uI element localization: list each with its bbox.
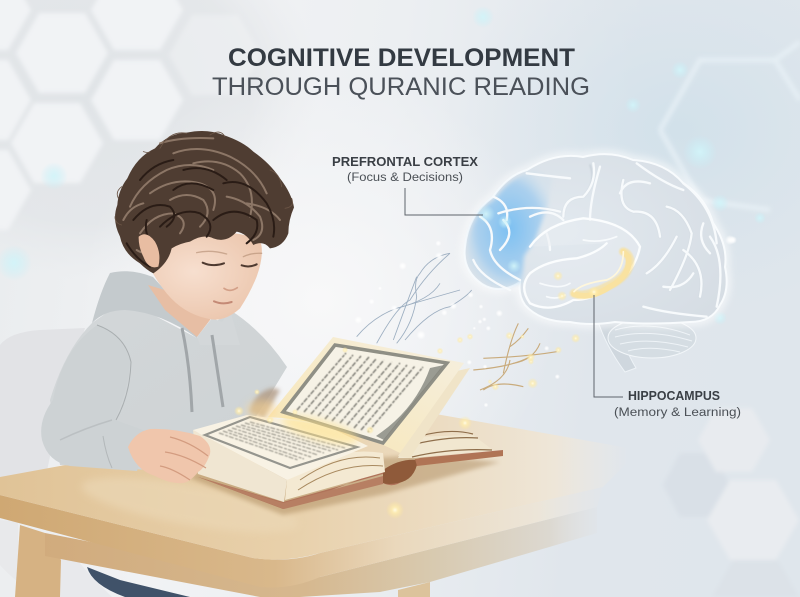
hoodie sleeve bbox=[41, 325, 148, 471]
book page block left bbox=[193, 430, 287, 502]
book lifted page behind bbox=[398, 368, 470, 458]
book lifted page bbox=[268, 337, 464, 453]
book page left text bbox=[219, 422, 345, 460]
gold sparkles bbox=[437, 332, 580, 391]
label: prefrontal cortex: PREFRONTAL CORTEX bbox=[332, 155, 479, 169]
chair bbox=[0, 328, 112, 597]
hippocampus glow bbox=[574, 252, 630, 296]
brain bbox=[465, 154, 727, 372]
eyes bbox=[197, 251, 262, 266]
neck bbox=[148, 285, 215, 337]
title: THROUGH QURANIC READING bbox=[212, 73, 590, 101]
label: hippocampus: HIPPOCAMPUS bbox=[628, 389, 720, 403]
book lifted page text bbox=[297, 353, 423, 432]
cerebellum bbox=[608, 318, 696, 358]
soft white area behind the boy bbox=[80, 70, 560, 530]
hood bbox=[92, 271, 197, 338]
frontal blue area bbox=[467, 170, 552, 288]
frontal glow spots bbox=[477, 205, 495, 223]
book shadow bbox=[190, 455, 500, 515]
boy bbox=[41, 131, 294, 471]
table leg right bbox=[398, 582, 430, 597]
title: COGNITIVE DEVELOPMENT bbox=[228, 44, 575, 72]
label: prefrontal cortex bbox=[332, 155, 479, 184]
hoodie body bbox=[50, 300, 287, 470]
table top sheen bbox=[78, 466, 302, 544]
jeans bbox=[87, 567, 190, 597]
book and table sparkles bbox=[234, 347, 472, 519]
table top surface bbox=[0, 413, 640, 560]
table bbox=[0, 413, 640, 597]
leader line: prefrontal cortex bbox=[405, 188, 483, 215]
book lifted page frame bbox=[283, 345, 447, 443]
book page left bbox=[193, 415, 368, 480]
neural strands: gold bbox=[473, 323, 557, 390]
label: hippocampus: (Memory & Learning) bbox=[614, 407, 741, 419]
nose and mouth bbox=[214, 288, 237, 303]
leader line: hippocampus bbox=[594, 295, 623, 397]
brain stem bbox=[597, 318, 636, 372]
label: hippocampus bbox=[614, 389, 741, 419]
arm shadow behind book bbox=[250, 388, 280, 418]
book cover right bbox=[415, 451, 503, 466]
table front edge bbox=[0, 487, 603, 588]
neural strands: blue bbox=[357, 253, 472, 343]
label: prefrontal cortex: (Focus & Decisions) bbox=[347, 172, 463, 184]
book glow bbox=[279, 410, 361, 450]
title bbox=[212, 44, 590, 101]
brain outer shape bbox=[465, 154, 727, 324]
book page left frame bbox=[205, 417, 357, 468]
book spine bbox=[383, 460, 418, 484]
ear bbox=[139, 234, 159, 267]
book lifted page ornament bbox=[376, 365, 444, 440]
book cover bbox=[198, 450, 503, 509]
hand bbox=[128, 429, 210, 483]
background light particles bbox=[0, 6, 766, 325]
brain outer glow bbox=[465, 154, 727, 324]
brain folds bbox=[473, 163, 720, 317]
book bbox=[193, 337, 503, 509]
table leg left bbox=[15, 525, 61, 597]
hair bbox=[115, 131, 294, 273]
white sparkles bbox=[354, 240, 560, 407]
hexagon network: top right bbox=[660, 42, 800, 210]
temporal lobe bbox=[524, 218, 640, 308]
face bbox=[138, 232, 262, 320]
drawstrings bbox=[182, 328, 223, 412]
hexagon pattern: bottom right bbox=[663, 408, 799, 597]
table apron bbox=[45, 507, 597, 597]
book page block right bbox=[398, 435, 493, 458]
hexagon pattern: top left bbox=[0, 0, 261, 230]
sparkles bbox=[354, 240, 580, 407]
head bbox=[115, 131, 294, 320]
